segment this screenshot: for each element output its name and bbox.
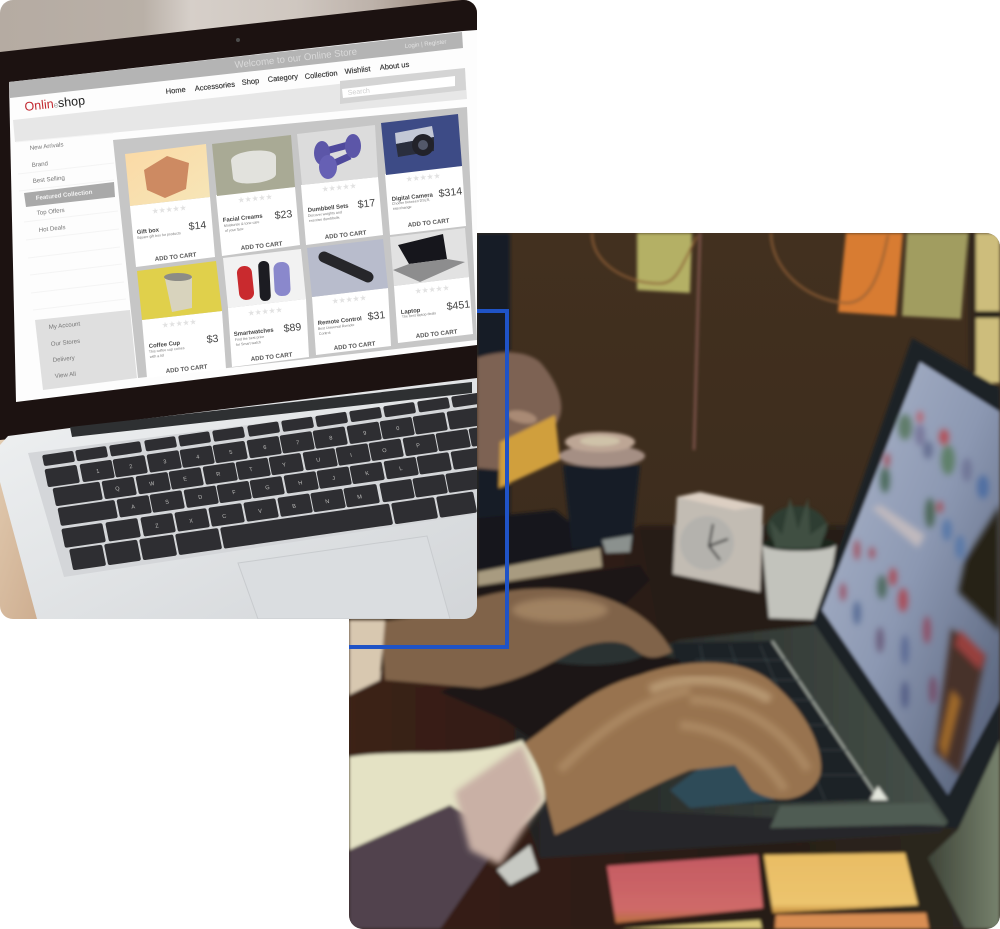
keyboard recess: [28, 396, 477, 577]
card: Smartwatches: Find the best price: [235, 335, 265, 342]
card: Digital Camera: Digital Camera: [392, 192, 434, 203]
sticky note: orange: [838, 233, 903, 316]
card: Digital Camera: ADD TO CART: [407, 217, 450, 229]
blue frame lines: [349, 311, 507, 647]
card: Facial Creams: Moisturise & tone care: [224, 220, 260, 228]
sidebar menu: View All: [54, 371, 76, 380]
card: Dumbbell Sets: ★★★★★: [321, 181, 357, 194]
lower sidebar panel: [35, 310, 137, 390]
window at right: [968, 233, 1000, 383]
space bar row: [69, 492, 477, 570]
navigation menu: About us: [379, 60, 410, 72]
navigation menu: [165, 60, 410, 96]
number key row: 9: [363, 431, 367, 437]
sticky note: olive: [902, 233, 968, 319]
number key row: 0: [396, 426, 400, 432]
card: Laptop: ADD TO CART: [415, 328, 458, 340]
sidebar menu: Brand: [31, 160, 48, 169]
bottom letter row: B: [292, 504, 297, 510]
card: Gift box: ADD TO CART: [154, 251, 197, 263]
home letter row: K: [365, 471, 370, 477]
top letter row: [52, 424, 504, 506]
card: Dumbbell Sets: [297, 125, 383, 245]
sidebar menu: Hot Deals: [38, 224, 66, 234]
card: Gift box: ★★★★★: [151, 203, 187, 216]
search placeholder: Search: [347, 88, 370, 97]
number key row: 3: [163, 459, 167, 466]
bottom letter row: Z: [155, 523, 160, 530]
right hand typing: [515, 663, 821, 835]
navigation menu: Collection: [304, 68, 338, 81]
top grey banner: [9, 32, 463, 98]
card: Digital Camera: ★★★★★: [405, 171, 441, 184]
laptop silver base: [0, 378, 477, 619]
top letter row: I: [350, 453, 353, 459]
card: Digital Camera: interchange: [393, 205, 412, 211]
navigation menu: Shop: [241, 76, 260, 87]
card: Dumbbell Sets: exercise dumbbells: [309, 216, 340, 223]
number key row: 6: [263, 445, 267, 451]
hinge bar: [70, 382, 472, 437]
light band below nav: [13, 70, 467, 142]
card: Dumbbell Sets: ADD TO CART: [324, 229, 367, 241]
card: Gift box: $14: [188, 219, 207, 233]
home letter row: S: [165, 499, 170, 506]
sidebar divider lines: [16, 133, 126, 310]
card: Smartwatches: ADD TO CART: [250, 351, 293, 363]
number key row: 8: [329, 435, 333, 442]
bottom letter row: M: [357, 494, 363, 501]
top letter row: T: [249, 467, 254, 473]
card: Facial Creams: ADD TO CART: [240, 240, 283, 252]
card: Coffee Cup: ADD TO CART: [165, 363, 208, 375]
card: Coffee Cup: Coffee Cup: [149, 341, 181, 350]
photo: person paying online with card at laptop: [349, 233, 1000, 929]
sticky note: pale green: [637, 233, 692, 293]
card: Gift box: Square gift box for products: [137, 231, 181, 240]
top letter row: Y: [282, 462, 287, 469]
card: Coffee Cup: [137, 261, 226, 378]
book stack: [477, 510, 650, 610]
laptop lid and screen: [812, 338, 1000, 828]
bag handles: [592, 233, 888, 303]
card: Facial Creams: $23: [274, 208, 293, 222]
dark desk shadow: [640, 530, 860, 640]
blue outline frame behind the left photo: [349, 233, 1000, 929]
featured collection highlight: [24, 182, 115, 207]
card: Digital Camera: $314: [438, 185, 463, 200]
card: Coffee Cup: $3: [206, 333, 219, 346]
bottom letter row: N: [325, 499, 330, 505]
card: Gift box: Gift box: [137, 228, 160, 236]
card: Remote Control: [307, 239, 391, 355]
mouse under left hand: [556, 642, 642, 666]
card: Remote Control: ADD TO CART: [333, 340, 376, 352]
bottom letter row: V: [258, 508, 263, 515]
number key row: 7: [296, 440, 300, 447]
card: Remote Control: $31: [367, 309, 386, 323]
card: Remote Control: Control: [319, 331, 331, 336]
card: Coffee Cup: ★★★★★: [161, 317, 197, 330]
card: Coffee Cup: This coffee cup comes: [149, 346, 185, 354]
left shirt cuff: [349, 620, 385, 695]
top letter row: Q: [115, 486, 121, 493]
laptop base: [515, 625, 948, 858]
sidebar menu: Our Stores: [50, 338, 81, 348]
card: Facial Creams: [212, 135, 300, 256]
home letter row: F: [232, 490, 237, 496]
sidebar menu: [29, 141, 93, 380]
desk surface: [349, 525, 1000, 929]
wood wall seam: [693, 233, 701, 450]
card: Smartwatches: $89: [283, 321, 302, 335]
top letter row: E: [183, 476, 188, 483]
header text: login and register: Login | Register: [405, 39, 447, 50]
home letter row: D: [198, 495, 203, 501]
sidebar menu: New Arrivals: [29, 141, 64, 152]
card: Laptop: The best laptop deals: [402, 311, 436, 319]
white object beside cuff: [497, 845, 538, 885]
navigation menu: Accessories: [194, 80, 236, 93]
pink sticky pad: [607, 855, 763, 923]
card: Dumbbell Sets: Discover weights and: [308, 210, 342, 218]
yellow sticky pad: [764, 853, 918, 913]
number key row: 1: [96, 469, 100, 475]
number key row: [44, 407, 482, 487]
card: Smartwatches: Smartwatches: [234, 328, 275, 338]
dark mouse pad area: [442, 656, 680, 736]
mauve lower sleeve: [349, 806, 489, 929]
navigation menu: Home: [165, 85, 186, 96]
laptop screen: [9, 30, 477, 402]
bottom letter row: X: [189, 518, 194, 525]
card: Smartwatches: ★★★★★: [247, 305, 283, 318]
search strip: [340, 68, 466, 104]
top letter row: O: [382, 448, 388, 454]
number key row: 4: [196, 454, 200, 461]
coffee cup: [559, 432, 645, 553]
top letter row: U: [316, 457, 321, 464]
sidebar menu: My Account: [48, 321, 81, 331]
home letter row: J: [332, 476, 336, 482]
sage desk edge: [928, 740, 1000, 929]
bottom letter row: C: [222, 514, 227, 520]
home letter row: G: [265, 485, 270, 492]
left hand on mouse: [380, 589, 672, 688]
highlight on left hand: [512, 598, 608, 622]
thumb on card: [509, 409, 538, 426]
home letter row: L: [399, 466, 403, 472]
card: Coffee Cup: with a lid: [150, 353, 164, 359]
navigation menu: Wishlist: [344, 64, 372, 76]
laptop keyboard: [670, 641, 888, 808]
home letter row: A: [131, 504, 136, 511]
top letter row: W: [149, 481, 156, 488]
card: Laptop: Laptop: [401, 308, 421, 316]
card-holding hand: [477, 352, 561, 470]
sidebar menu: Best Selling: [32, 174, 65, 185]
top letter row: R: [216, 472, 221, 478]
sidebar menu: Featured Collection: [35, 189, 93, 202]
cuff pale panel: [455, 745, 543, 865]
wooden table: [0, 440, 37, 619]
card: Facial Creams: of your face: [225, 227, 244, 233]
sidebar menu: Delivery: [52, 355, 76, 364]
logo: Online shop: Onlineshop: [24, 93, 86, 114]
trackpad: [238, 536, 450, 619]
number key row: 2: [129, 464, 133, 470]
keyboard keys: [42, 392, 504, 570]
bottom letter row: [61, 469, 481, 548]
gold credit card: [499, 415, 560, 488]
potted succulent: [762, 498, 836, 620]
laptop bezel: [0, 0, 477, 440]
header text: welcome: Welcome to our Online Store: [234, 47, 358, 71]
product grid background: [113, 107, 477, 378]
card: Smartwatches: [223, 249, 309, 367]
dark shelf at upper left: [477, 233, 510, 533]
home letter row: H: [298, 480, 303, 487]
screen content: [840, 411, 1000, 775]
photo: laptop displaying online shop: [0, 0, 504, 619]
webcam: [236, 38, 240, 42]
card: Smartwatches: for Smart watch: [236, 340, 261, 347]
number key row: 5: [229, 450, 233, 456]
function key row: [42, 392, 484, 466]
lower sticky notes: [620, 913, 929, 929]
card: Facial Creams: Facial Creams: [223, 214, 264, 224]
card: Dumbbell Sets: Dumbbell Sets: [308, 203, 350, 214]
home letter row: [57, 447, 486, 526]
card: Digital Camera: Choose between DSLR,: [392, 198, 430, 206]
white shirt sleeve: [349, 740, 545, 850]
card: Laptop: [390, 228, 473, 343]
card: Remote Control: ★★★★★: [331, 293, 367, 306]
card: Dumbbell Sets: $17: [357, 197, 376, 211]
search box: [342, 76, 455, 98]
card: Laptop: ★★★★★: [414, 283, 450, 296]
card: Digital Camera: [381, 114, 466, 235]
navigation menu: Category: [267, 72, 299, 84]
card: Remote Control: Best Universal Remote: [318, 323, 355, 331]
card: Facial Creams: ★★★★★: [237, 192, 273, 205]
blurred background above laptop: [0, 0, 477, 52]
card: Laptop: $451: [446, 298, 471, 313]
sidebar menu: Top Offers: [36, 207, 65, 217]
card: Gift box: [125, 144, 215, 267]
top letter row: P: [416, 443, 421, 449]
desk clock: [673, 492, 763, 592]
card: Remote Control: Remote Control: [318, 316, 362, 327]
